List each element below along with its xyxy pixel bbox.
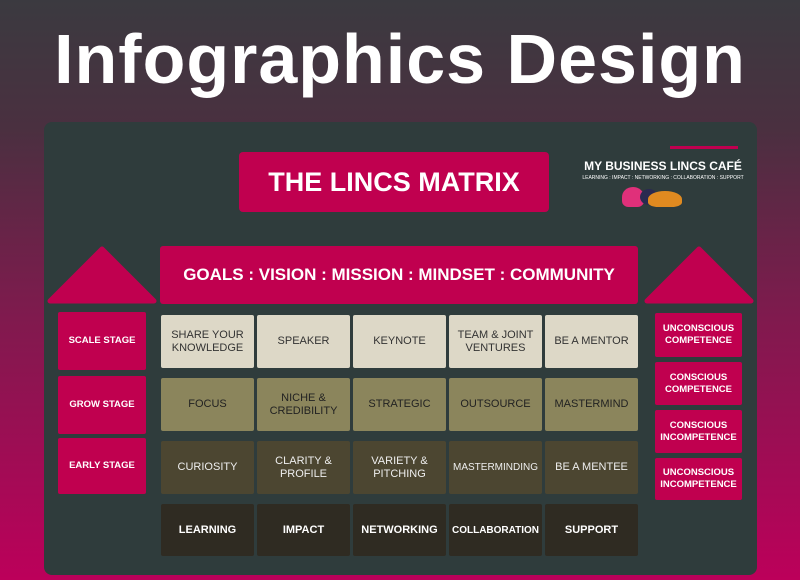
grid: SPEAKER	[278, 335, 329, 347]
logo: MY BUSINESS LINCS CAFÉ	[584, 159, 742, 173]
arrow: left triangle	[48, 246, 156, 304]
competence: conscious competence: CONSCIOUS	[670, 372, 727, 382]
heading: the lincs matrix: THE LINCS MATRIX	[268, 166, 520, 196]
competence: conscious competence	[655, 362, 742, 405]
competence: unconscious competence: UNCONSCIOUS	[663, 323, 734, 334]
logo: LEARNING : IMPACT : NETWORKING : COLLABORATION : SUPPORT	[582, 175, 744, 181]
grid	[161, 315, 638, 556]
grid: PROFILE	[280, 468, 327, 480]
stage: early: EARLY STAGE	[69, 460, 135, 471]
competence: unconscious incompetence: UNCONSCIOUS	[663, 467, 734, 478]
title: Infographics Design	[54, 20, 746, 98]
grid: VENTURES	[466, 342, 525, 354]
heading: the lincs matrix	[239, 152, 549, 212]
competence: unconscious incompetence	[655, 458, 742, 500]
grid: CREDIBILITY	[270, 404, 337, 416]
grid: KEYNOTE	[373, 335, 426, 347]
grid: OUTSOURCE	[460, 398, 531, 410]
competence: conscious incompetence: INCOMPETENCE	[660, 432, 737, 442]
grid: BE A MENTEE	[555, 461, 628, 473]
grid: IMPACT	[283, 524, 324, 536]
grid: COLLABORATION	[452, 524, 539, 536]
goals bar: GOALS : VISION : MISSION : MINDSET : COMMUNITY	[183, 265, 615, 284]
panel: matrix	[44, 122, 757, 575]
stage: scale: SCALE STAGE	[69, 335, 135, 346]
grid: MASTERMIND	[555, 398, 628, 410]
competence: conscious competence: COMPETENCE	[665, 384, 732, 394]
grid: FOCUS	[188, 398, 227, 410]
arrow: right triangle	[644, 246, 754, 304]
competence: unconscious competence: COMPETENCE	[665, 335, 732, 346]
grid: TEAM & JOINT	[458, 328, 533, 340]
grid: KNOWLEDGE	[172, 342, 243, 354]
grid: NETWORKING	[361, 524, 438, 536]
competence: unconscious competence	[655, 313, 742, 357]
competence: unconscious incompetence: INCOMPETENCE	[660, 479, 737, 490]
grid: PITCHING	[373, 468, 426, 480]
grid: BE A MENTOR	[554, 335, 629, 347]
stage: scale	[58, 312, 146, 370]
goals bar	[160, 246, 638, 304]
grid: SHARE YOUR	[171, 328, 244, 340]
stage: early	[58, 438, 146, 494]
competence: conscious incompetence: CONSCIOUS	[670, 420, 727, 430]
grid: MASTERMINDING	[453, 462, 538, 473]
grid: VARIETY &	[371, 454, 428, 466]
competence: conscious incompetence	[655, 410, 742, 453]
grid: STRATEGIC	[368, 398, 431, 410]
icon: hats	[622, 187, 682, 207]
grid: LEARNING	[179, 524, 236, 536]
grid: NICHE &	[281, 392, 326, 404]
stage: grow	[58, 376, 146, 434]
grid: SUPPORT	[565, 524, 618, 536]
logo	[582, 146, 744, 207]
stage: grow: GROW STAGE	[69, 399, 135, 410]
grid: CLARITY &	[275, 454, 332, 466]
grid: CURIOSITY	[178, 461, 237, 473]
